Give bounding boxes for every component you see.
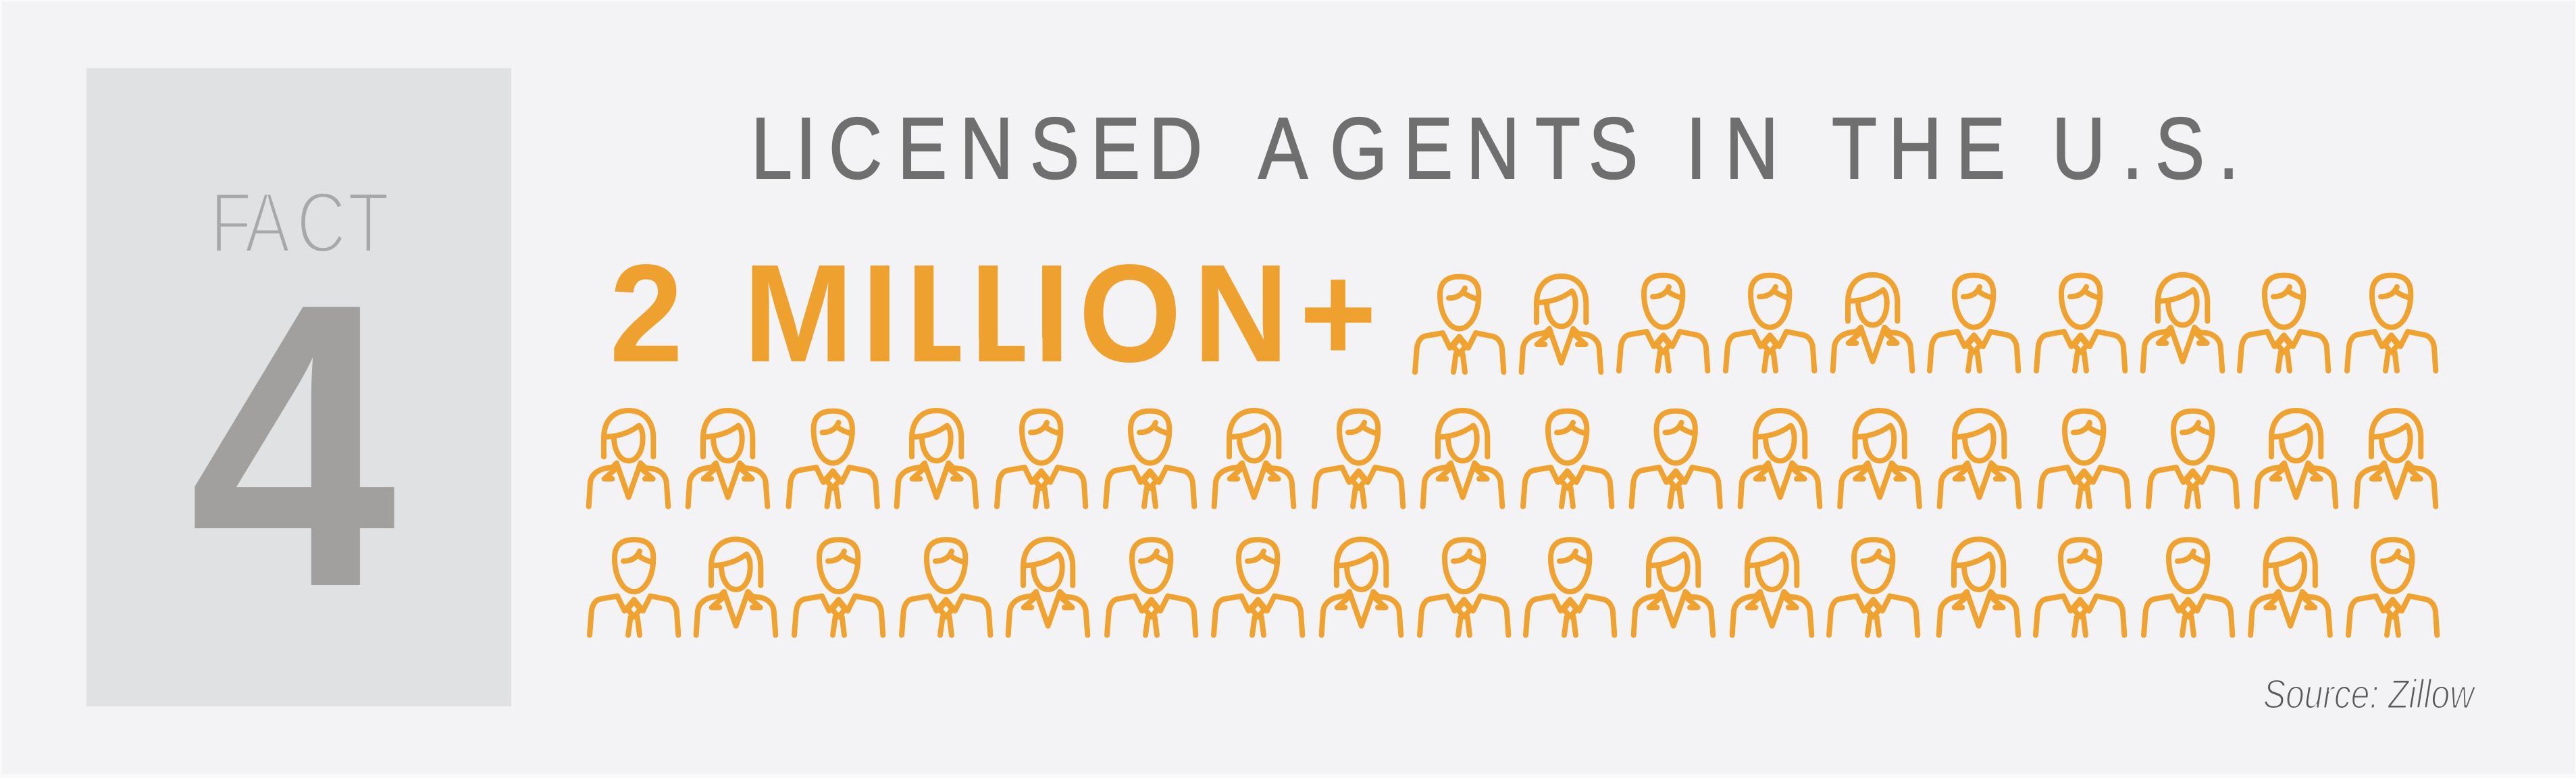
icon: male agent <box>2036 276 2125 371</box>
panel: fact number <box>86 68 511 706</box>
icon: male agent <box>590 540 678 636</box>
icon: male agent <box>902 540 990 636</box>
icon: male agent <box>1106 411 1194 507</box>
icon: male agent <box>1420 540 1508 636</box>
icon: female agent <box>696 540 775 636</box>
icon: female agent <box>688 411 767 507</box>
icon: female agent <box>2143 275 2222 371</box>
icon: male agent <box>2144 540 2232 636</box>
icon: male agent <box>1526 540 1614 636</box>
icon row 3 <box>590 540 2437 636</box>
icon: male agent <box>2240 276 2328 371</box>
icon: female agent <box>1214 411 1293 507</box>
icon: female agent <box>1840 411 1920 507</box>
icon: male agent <box>1726 276 1814 371</box>
icon: male agent <box>1107 540 1195 636</box>
icon: male agent <box>1930 276 2018 371</box>
icon: female agent <box>1940 411 2019 507</box>
title: LICENSED AGENTS IN THE U.S. <box>751 101 2239 197</box>
icon: male agent <box>1632 411 1720 507</box>
icon: male agent <box>1829 540 1917 636</box>
icon: female agent <box>1423 411 1502 507</box>
icon row 2 <box>589 411 2436 507</box>
icon: female agent <box>2356 411 2436 507</box>
icon: female agent <box>1522 276 1601 372</box>
icon: female agent <box>589 411 668 507</box>
icon: male agent <box>2347 276 2436 371</box>
icon: male agent <box>997 411 1085 507</box>
icon: female agent <box>1732 540 1811 636</box>
label: FACT: FACT <box>210 176 389 271</box>
icon: male agent <box>789 411 877 507</box>
icon: female agent <box>1741 411 1820 507</box>
icon: male agent <box>2040 411 2128 507</box>
icon: male agent <box>1415 277 1503 372</box>
icon: female agent <box>897 411 976 507</box>
icon: female agent <box>1634 540 1713 636</box>
icon: male agent <box>1619 276 1707 371</box>
icon row 1 <box>1415 275 2436 372</box>
icon: male agent <box>794 540 883 636</box>
icon: female agent <box>1008 540 1087 636</box>
icon: male agent <box>2348 540 2437 636</box>
icon: male agent <box>1523 411 1612 507</box>
icon: male agent <box>1314 411 1403 507</box>
icon: female agent <box>2257 411 2336 507</box>
source note: Source: Zillow <box>2263 671 2476 717</box>
icon: female agent <box>2250 540 2330 636</box>
icon: male agent <box>1214 540 1302 636</box>
icon: male agent <box>2148 411 2237 507</box>
icon: male agent <box>2036 540 2124 636</box>
icon: female agent <box>1833 275 1912 371</box>
icon: female agent <box>1939 540 2018 636</box>
number: 4: 4 <box>189 219 398 671</box>
icon: female agent <box>1322 540 1401 636</box>
headline number: 2 MILLION+ <box>610 235 1376 391</box>
